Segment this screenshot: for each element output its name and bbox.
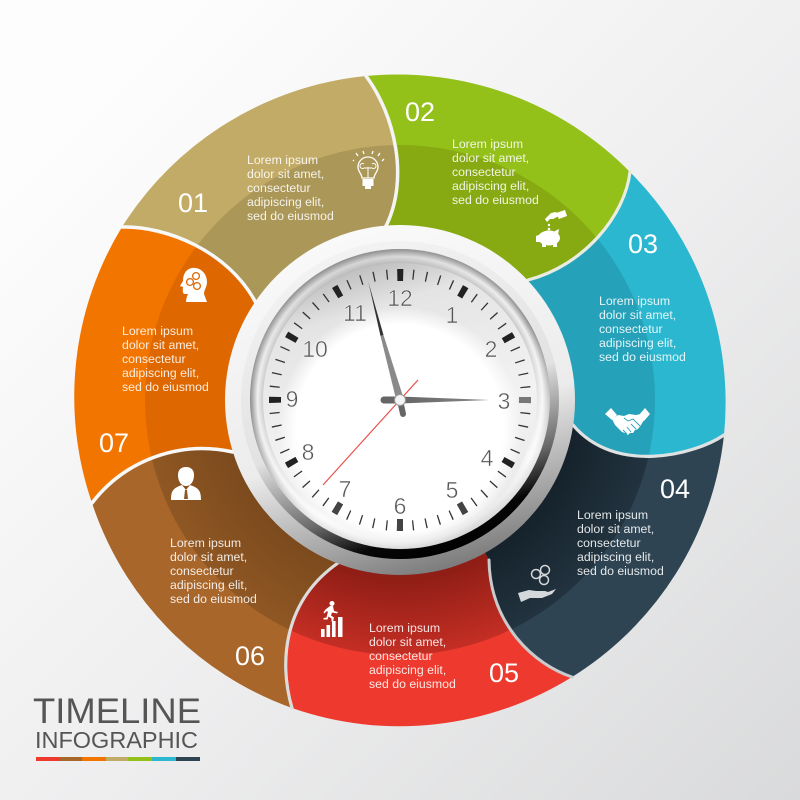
icon: head with gears (180, 268, 207, 302)
text 04: adipiscing elit, (577, 550, 654, 564)
clock numerals: 4 (481, 445, 494, 471)
panel: 06 (92, 450, 336, 708)
text 02: dolor sit amet, (452, 151, 529, 165)
minute hand (368, 282, 404, 414)
text 04: sed do eiusmod (577, 564, 664, 578)
clock numerals: 5 (446, 477, 458, 503)
text 05: consectetur (369, 649, 433, 663)
segment 05 (286, 400, 572, 726)
text 07: dolor sit amet, (122, 338, 199, 352)
clock numerals: 9 (286, 386, 298, 412)
clock (225, 225, 575, 575)
text 03: Lorem ipsum (599, 294, 670, 308)
segment 05 inner band (292, 553, 509, 655)
text 02: consectetur (452, 165, 516, 179)
second hand (323, 380, 418, 485)
number 04: 04 (660, 474, 690, 504)
text 06: consectetur (170, 564, 234, 578)
clock numerals: 2 (485, 336, 497, 362)
clock numerals: 7 (339, 476, 351, 502)
text 04: consectetur (577, 536, 641, 550)
text 03: sed do eiusmod (599, 350, 686, 364)
text 02: Lorem ipsum (452, 137, 523, 151)
panel: 03 (528, 173, 726, 455)
text 05: dolor sit amet, (369, 635, 446, 649)
text 03: adipiscing elit, (599, 336, 676, 350)
panel: 04 (485, 427, 724, 676)
text 02: adipiscing elit, (452, 179, 529, 193)
segment 04 (400, 400, 724, 677)
face glare (278, 306, 522, 550)
number 03: 03 (628, 229, 658, 259)
text 01: Lorem ipsum (247, 153, 318, 167)
text 01: adipiscing elit, (247, 195, 324, 209)
clock numerals: 1 (446, 302, 458, 328)
text 06: sed do eiusmod (170, 592, 257, 606)
clock numerals: 6 (394, 493, 406, 519)
title: TIMELINE: TIMELINE (33, 692, 201, 731)
text 03: consectetur (599, 322, 663, 336)
clock numerals: 8 (302, 439, 314, 465)
icon: handshake (605, 408, 650, 435)
segment 03 (400, 172, 726, 456)
clock metal bezel (250, 249, 550, 549)
text 01: consectetur (247, 181, 311, 195)
clock numerals (286, 285, 510, 519)
text 07: consectetur (122, 352, 186, 366)
subtitle: INFOGRAPHIC: INFOGRAPHIC (35, 727, 198, 753)
icon: piggy bank (536, 210, 567, 247)
number 07: 07 (99, 428, 129, 458)
segment 06 (92, 400, 400, 708)
text 01: sed do eiusmod (247, 209, 334, 223)
bezel reflection (250, 249, 550, 549)
icon: businessman (171, 467, 201, 500)
segment 03 inner band (529, 240, 655, 455)
segment 01 inner band (198, 145, 396, 300)
text 06: dolor sit amet, (170, 550, 247, 564)
number 02: 02 (405, 97, 435, 127)
segment 02 (366, 74, 630, 400)
segment 07 (74, 227, 400, 503)
segment 06 inner band (152, 450, 336, 630)
number 01: 01 (178, 188, 208, 218)
minute ticks (274, 274, 526, 526)
hour hand (384, 396, 490, 404)
panel: 05 (287, 553, 570, 726)
text 05: sed do eiusmod (369, 677, 456, 691)
segment 07 inner band (145, 248, 254, 456)
text 07: Lorem ipsum (122, 324, 193, 338)
tick highlights (332, 397, 531, 531)
clock numerals: 11 (343, 300, 367, 326)
text 04: Lorem ipsum (577, 508, 648, 522)
icon: light bulb (353, 151, 384, 189)
hour ticks (275, 275, 525, 525)
text 07: adipiscing elit, (122, 366, 199, 380)
clock face (263, 263, 537, 537)
segment 02 inner band (388, 145, 596, 279)
icon: hand with gears (518, 566, 556, 602)
text 01: dolor sit amet, (247, 167, 324, 181)
segment 04 inner band (485, 427, 648, 629)
text 03: dolor sit amet, (599, 308, 676, 322)
colour bar (36, 757, 200, 761)
clock numerals: 12 (387, 285, 413, 311)
clock numerals: 10 (302, 336, 328, 362)
segment 01 (122, 76, 400, 400)
number 05: 05 (489, 658, 519, 688)
clock outer disc (225, 225, 575, 575)
text 07: sed do eiusmod (122, 380, 209, 394)
panel: 02 (368, 74, 629, 280)
text 04: dolor sit amet, (577, 522, 654, 536)
icon: runner on bars (321, 601, 342, 637)
number 06: 06 (235, 641, 265, 671)
panel: 07 (74, 228, 254, 502)
clock numerals: 3 (498, 388, 510, 414)
text 05: Lorem ipsum (369, 621, 440, 635)
panel: 01 (123, 76, 396, 300)
text 06: adipiscing elit, (170, 578, 247, 592)
clock rim (241, 241, 559, 559)
text 06: Lorem ipsum (170, 536, 241, 550)
text 05: adipiscing elit, (369, 663, 446, 677)
text 02: sed do eiusmod (452, 193, 539, 207)
hand cap (394, 394, 406, 406)
